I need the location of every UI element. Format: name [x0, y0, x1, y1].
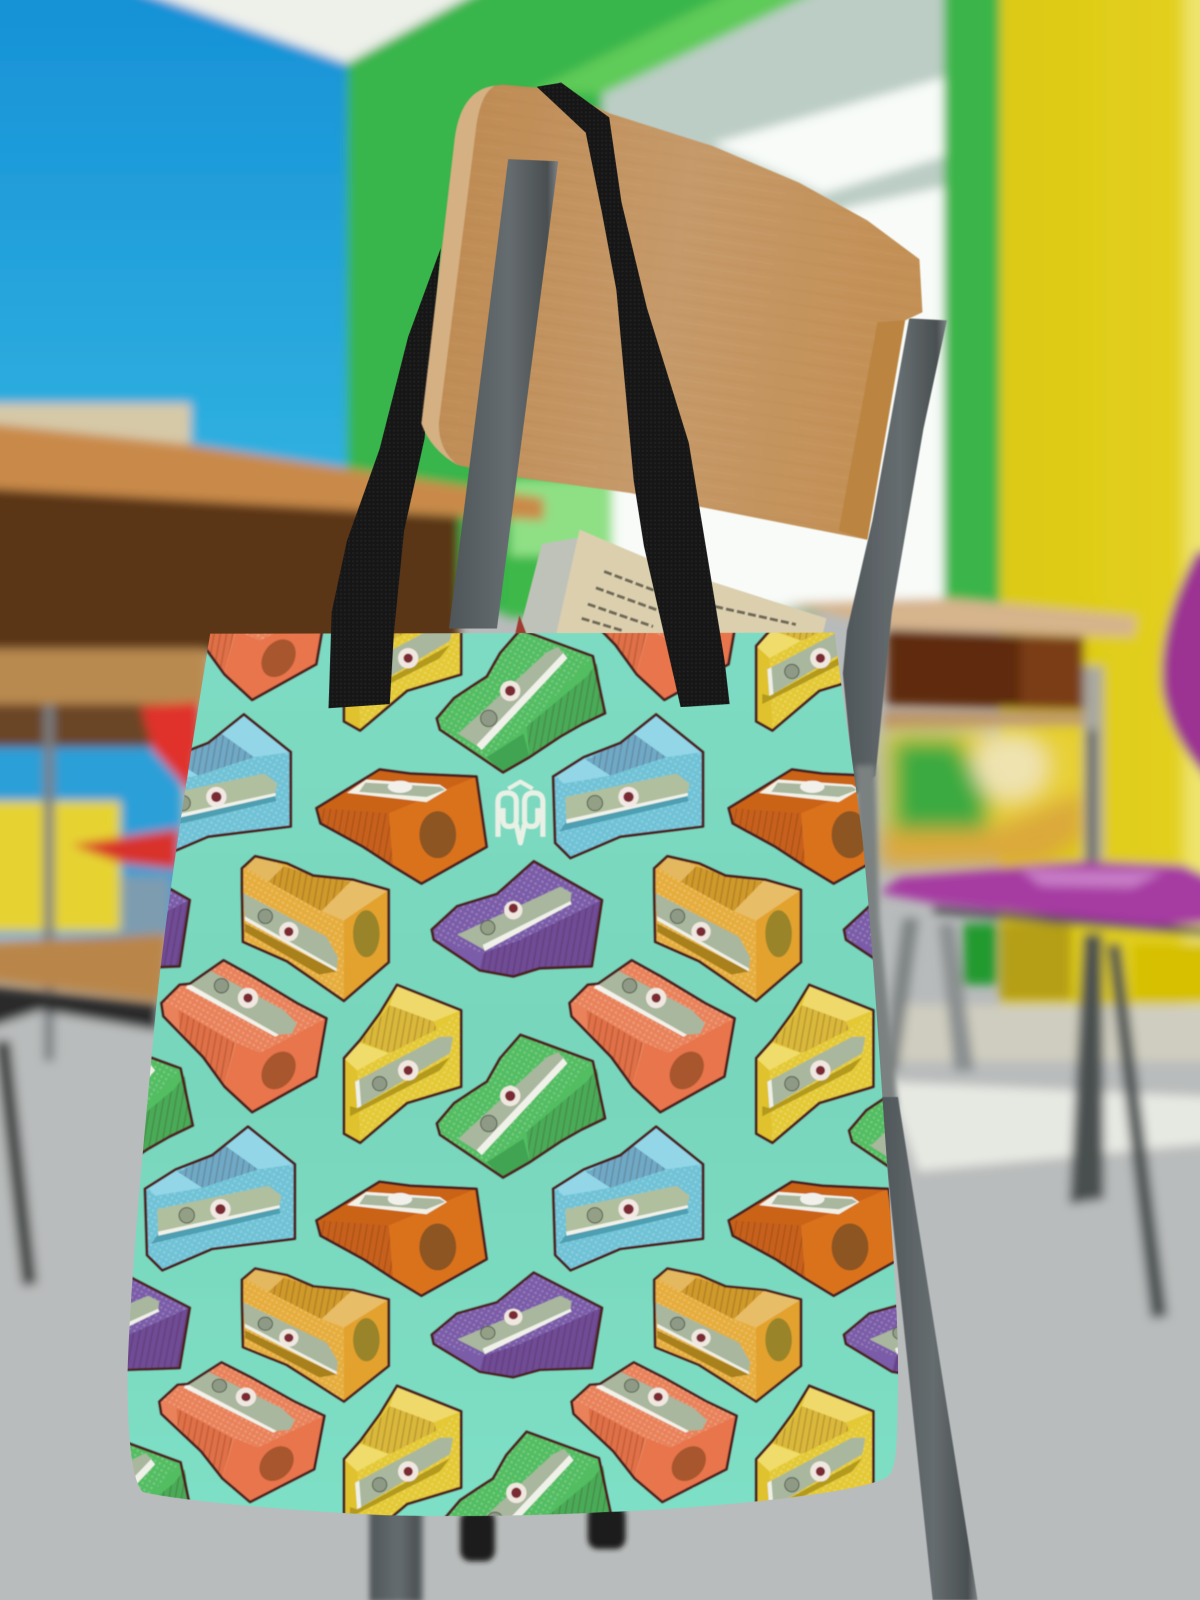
sharpener: green right edge [846, 1097, 888, 1168]
ceiling [107, 0, 500, 63]
left handle strap [329, 248, 441, 708]
light green band along the window recess [531, 0, 842, 94]
floor [0, 1010, 1200, 1600]
sharpener: purple lower left edge [128, 1276, 192, 1372]
light green below chair [510, 480, 612, 612]
sharpener: coral bottom left [159, 1362, 324, 1502]
sharpener: coral right [569, 960, 735, 1112]
sharpener: yellow top right [754, 632, 842, 733]
sharpener: amber left [242, 856, 389, 1001]
floor light patch [888, 1082, 1200, 1171]
front chair post [449, 159, 558, 629]
sharpener: yellow bottom left [342, 1384, 464, 1516]
sharpener: orange lower right [729, 1182, 899, 1296]
green pillar [944, 0, 1000, 612]
sharpener: blue lower left [145, 1127, 295, 1270]
blurred yellow chair behind desk [880, 730, 1084, 867]
sharpener: purple centre [432, 861, 602, 977]
sharpener: orange centre [316, 769, 487, 884]
backrest darker side panel [839, 320, 905, 540]
sharpener: yellow left [344, 985, 461, 1143]
sharpener: coral top right [600, 632, 736, 702]
left desk [0, 403, 544, 1286]
sharpener: purple lower centre [432, 1272, 602, 1377]
skirting [898, 1005, 1200, 1061]
backrest grain [421, 85, 922, 540]
right desk and chair [785, 551, 1200, 1318]
sharpener: green top [437, 630, 605, 772]
yellow wall [1000, 0, 1200, 1005]
sharpener: orange right [726, 767, 866, 886]
sharpener: purple lower right edge [842, 1304, 898, 1375]
green wall [347, 0, 949, 612]
sharpener: coral left [161, 960, 327, 1112]
sharpener: yellow top left [342, 633, 464, 733]
sharpener: coral bottom right [571, 1362, 737, 1502]
sharpener: amber lower left [242, 1268, 389, 1402]
sharpener: green bottom centre [444, 1430, 612, 1516]
tote bag body [128, 632, 898, 1516]
sharpener: green bottom left edge [130, 1442, 191, 1500]
lower chair leg and feet [369, 1505, 626, 1600]
right chair post [843, 318, 978, 1600]
sharpener: blue lower centre [553, 1127, 703, 1270]
blue wall [0, 0, 349, 469]
sharpener: amber lower right [654, 1268, 801, 1402]
window pane lower [612, 187, 944, 608]
window recess [602, 0, 944, 612]
sharpener: yellow bottom right [754, 1384, 876, 1502]
right handle strap [537, 83, 730, 707]
sharpener: blue left [176, 712, 293, 853]
sharpener: amber right [654, 856, 801, 1001]
sharpener: blue centre [553, 714, 703, 858]
sharpener: yellow right [756, 985, 873, 1143]
backrest plywood edge [421, 86, 495, 465]
sharpener: purple right edge [842, 904, 873, 960]
sharpener: green centre [437, 1035, 605, 1178]
sharpener: coral top left [207, 633, 324, 702]
sharpener: green left edge [142, 1056, 195, 1155]
window pane upper [712, 78, 944, 194]
sharpener: purple left edge [160, 887, 192, 970]
brand logo [498, 782, 543, 843]
book in the bag [515, 530, 827, 635]
sharpener: orange lower centre [316, 1182, 487, 1296]
chair backrest [421, 85, 922, 540]
